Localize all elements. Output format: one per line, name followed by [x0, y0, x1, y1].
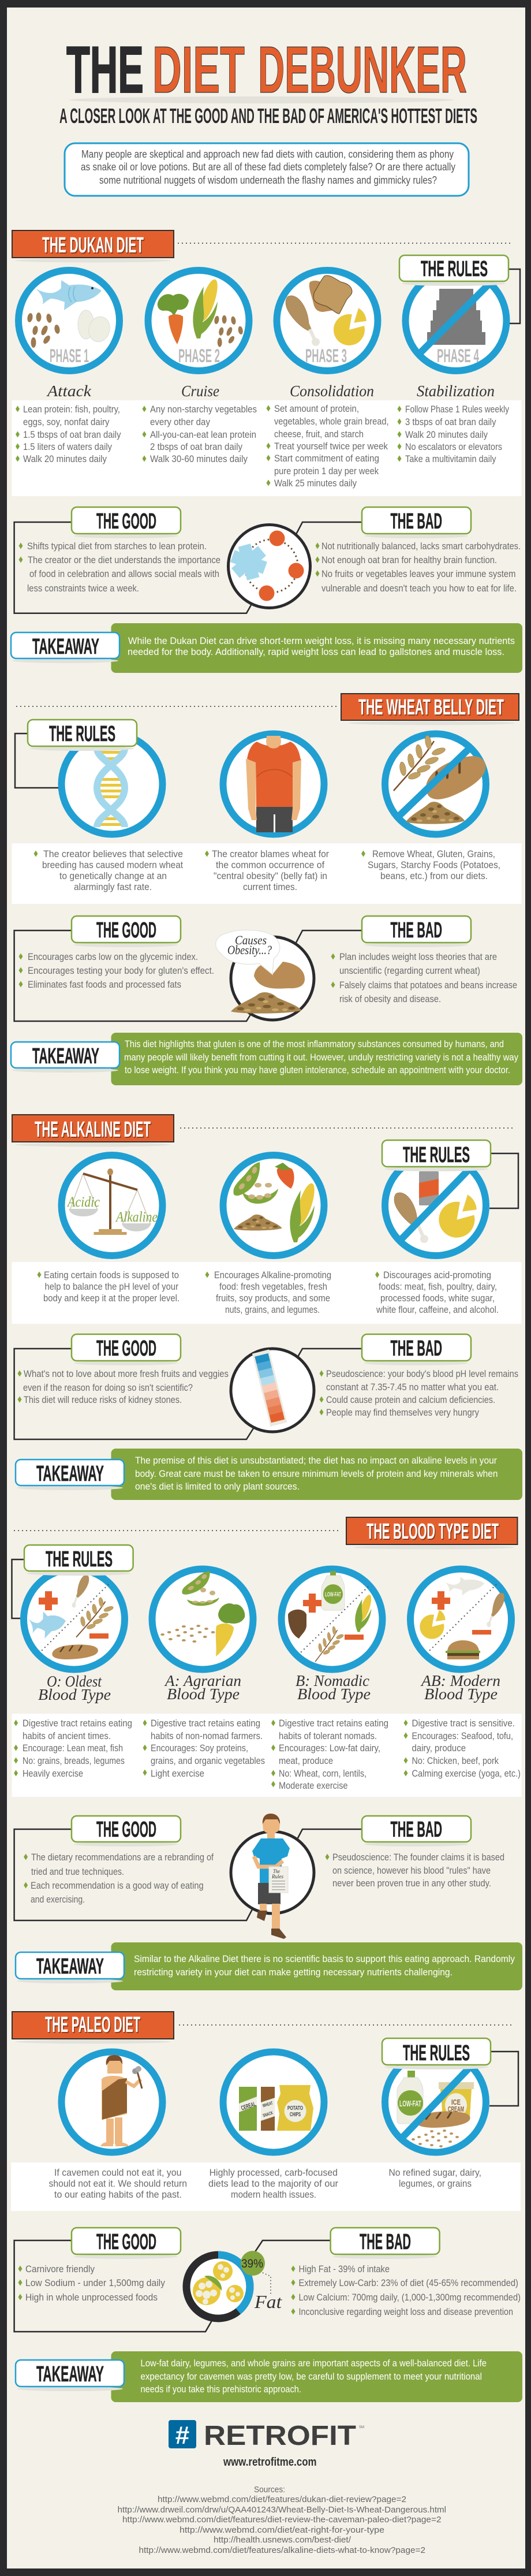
icon: ice cream tub: CREAM [448, 2105, 464, 2113]
list: consolidation: Set amount of protein, [274, 404, 359, 414]
panel: rules text: processed foods, white sugar, [380, 1293, 495, 1304]
panel: rules text: The creator blames wheat for [212, 849, 329, 859]
label: the bad: THE BAD [390, 918, 442, 943]
list: good: tried and true techniques. [31, 1867, 124, 1877]
list: type O: habits of ancient times. [23, 1731, 111, 1741]
sources: http://www.drweil.com/drw/u/QAA401243/Wheat-Belly-Diet-Is-Wheat-Dangerous.html [118, 2505, 446, 2515]
sources: http://www.webmd.com/diet/eat-right-for-your-type [180, 2525, 384, 2535]
icon: man with rules paper: The [273, 1868, 280, 1874]
label: the bad: THE BAD [390, 1818, 442, 1842]
icon: eggs [78, 310, 113, 344]
list: bad: Not enough oat bran for healthy brain function. [321, 555, 497, 565]
heading: The Dukan Diet: THE DUKAN DIET [43, 234, 144, 259]
list: attack [16, 404, 121, 464]
icon: carrot [158, 294, 189, 344]
panel: rules text: Remove Wheat, Gluten, Grains, [372, 849, 495, 859]
list: good: less constraints twice a week. [27, 583, 139, 594]
icon: obesity bubble with potato and grain: Causes [235, 933, 267, 947]
circle: belly [223, 734, 324, 834]
blood type names: Blood Type [38, 1686, 111, 1703]
section: Alkaline diet [12, 1115, 522, 1500]
list: type A: habits of non-nomad farmers. [151, 1731, 263, 1741]
phase names: Attack [46, 382, 92, 400]
rules label [12, 1545, 133, 1618]
panel: rules text: breeding has caused modern wheat [42, 860, 183, 870]
list: good: and exercising. [31, 1894, 85, 1905]
sources: Sources: [254, 2485, 285, 2495]
takeaway: Alkaline: TAKEAWAY [36, 1462, 104, 1486]
list: good: High in whole unprocessed foods [25, 2292, 158, 2303]
circle: balance scale: Alkaline [115, 1209, 158, 1225]
icon: potato chips: POTATO [287, 2105, 303, 2112]
panel: rules text: current times. [243, 882, 297, 892]
list: bad: unscientific (regarding current wheat) [339, 966, 480, 976]
list: cruise: Any non-starchy vegetables [150, 404, 257, 415]
icon: fat ring 39 percent: 39% [241, 2257, 263, 2270]
sources: http://www.webmd.com/diet/features/dukan-diet-review?page=2 [158, 2495, 406, 2504]
panel: rules text: white flour, caffeine, and alcohol. [376, 1305, 499, 1315]
list: cruise: 2 tbsps of oat bran daily [150, 442, 243, 452]
label: the good [72, 1816, 181, 1847]
label: the bad [362, 1816, 471, 1847]
icon: fat ring 39 percent [186, 2251, 282, 2318]
list: bad: People may find themselves very hungry [326, 1408, 480, 1418]
panel: rules text: body and keep it at the proper level. [43, 1293, 180, 1304]
intro box: as snake oil or love potions. But are all of these fad diets completely false? Or are there actually [81, 161, 455, 173]
heading: The Paleo Diet [12, 2012, 174, 2043]
circle: balance scale [61, 1155, 163, 1256]
panel: rules text [11, 2162, 521, 2211]
list: bad: on science, however his blood "rules" have [332, 1866, 491, 1876]
panel: rules text: Eating certain foods is supposed to [44, 1270, 179, 1280]
label: the bad [362, 1334, 471, 1365]
list: stabilization: Walk 20 minutes daily [405, 430, 488, 440]
list: bad [326, 1852, 504, 1889]
label: the bad: THE BAD [360, 2230, 411, 2254]
circle: DNA [61, 734, 163, 834]
circle: balance scale: Acidic [66, 1194, 100, 1210]
circle: type B [282, 1569, 382, 1669]
panel: blood type rules [12, 1714, 522, 1797]
takeaway: Paleo: expectancy for cavemen was pretty low, be careful to supplement to meet your nutritional [141, 2371, 482, 2382]
heading: The Paleo Diet: THE PALEO DIET [45, 2013, 140, 2037]
panel: rules text [12, 843, 522, 904]
list: good: Each recommendation is a good way of eating [31, 1881, 204, 1891]
list: type A: Light exercise [151, 1769, 204, 1779]
list: type A: Digestive tract retains eating [151, 1718, 260, 1729]
list: type AB [404, 1718, 521, 1779]
panel: rules text: If cavemen could not eat it, you [54, 2168, 181, 2178]
panel: rules text: Encourages Alkaline-promoting [214, 1270, 331, 1280]
label: the bad: THE BAD [390, 509, 442, 534]
blood type names: O: Oldest [47, 1673, 102, 1690]
panel: rules text: beans, etc.) from our diets. [380, 871, 488, 881]
list: type O: Heavily exercise [23, 1769, 83, 1779]
panel: rules text: Discourages acid-promoting [383, 1270, 491, 1280]
logo: Retrofit: RETROFIT [204, 2421, 356, 2451]
list: good [17, 1369, 229, 1405]
label: the good: THE GOOD [96, 918, 156, 943]
list: good [18, 952, 214, 990]
blood type names: A: Agrarian [164, 1672, 241, 1689]
label: the good [72, 1334, 181, 1365]
rules label [399, 255, 520, 323]
blood type names: Blood Type [297, 1685, 371, 1703]
heading: The Alkaline Diet: THE ALKALINE DIET [36, 1119, 151, 1143]
good and bad: Paleo [14, 2228, 521, 2332]
heading: The Alkaline Diet [12, 1115, 174, 1147]
icon: pH strip [231, 1349, 314, 1432]
takeaway: Paleo: Low-fat dairy, legumes, and whole grains are important aspects of a well-balanced diet. Life [141, 2358, 487, 2369]
icon: snack box: SNACK [262, 2110, 274, 2119]
list: good: Low Sodium - under 1,500mg daily [25, 2278, 166, 2288]
panel: rules text: modern health issues. [231, 2190, 316, 2200]
takeaway: Dukan: needed for the body. Additionally, rapid weight loss can lead to gallstones and muscle loss. [128, 646, 504, 657]
phase 2 circle: PHASE 2 [178, 345, 220, 366]
label: the good: THE GOOD [96, 1337, 156, 1361]
list: stabilization [397, 404, 510, 464]
panel: rules text: The creator believes that selective [43, 849, 183, 859]
good and bad: Wheat Belly [14, 916, 517, 1021]
takeaway: Wheat Belly: TAKEAWAY [32, 1044, 99, 1069]
title shadow [69, 96, 454, 103]
list: cruise: every other day [150, 417, 211, 427]
panel: rules text: food: fresh vegetables, fresh [219, 1282, 327, 1292]
circle: no acid foods [385, 1155, 486, 1256]
section: Wheat Belly diet [11, 694, 522, 1085]
phase names: Cruise [181, 382, 219, 400]
list: good: This diet will reduce risks of kidney stones. [24, 1395, 182, 1405]
panel: rules text: foods: meat, fish, poultry, dairy, [379, 1282, 497, 1292]
list: good: Shifts typical diet from starches to lean protein. [27, 541, 207, 552]
icon: low-fat jug [321, 1571, 345, 1610]
panel: phase rules [12, 400, 522, 496]
list: bad: Pseudoscience: The founder claims it is based [332, 1852, 504, 1863]
list: bad [315, 541, 521, 594]
list: good [18, 541, 220, 594]
panel: rules text: fruits, soy products, and some [216, 1293, 330, 1304]
title [66, 33, 467, 107]
phase 2 circle [148, 270, 249, 371]
list: stabilization: Take a multivitamin daily [405, 454, 496, 464]
icon: burger [446, 1640, 480, 1659]
phase names: Stabilization [417, 382, 495, 400]
panel: rules text: Sugars, Starchy Foods (Potatoes, [368, 860, 500, 870]
sources: http://www.webmd.com/diet/features/diet-review-the-caveman-paleo-diet?page=2 [122, 2515, 441, 2525]
takeaway: Alkaline [16, 1449, 522, 1500]
website: www.retrofitme.com [223, 2456, 316, 2469]
icon: snack box: WHEAT [262, 2100, 274, 2109]
list: stabilization: No escalators or elevators [405, 442, 502, 452]
label: the bad [362, 916, 471, 947]
list: bad: risk of obesity and disease. [339, 994, 441, 1004]
list: consolidation: vegetables, whole grain bread, [274, 416, 389, 427]
list: bad [291, 2264, 521, 2317]
intro box [65, 143, 469, 196]
circle: no refined food [385, 2052, 486, 2152]
list: type O [14, 1718, 132, 1779]
blood type names: B: Nomadic [296, 1672, 369, 1689]
phase 1 circle: PHASE 1 [50, 345, 89, 366]
circle: type A [152, 1569, 253, 1669]
takeaway: Alkaline: one's diet is limited to only plant sources. [135, 1481, 300, 1492]
blood type names: Blood Type [167, 1685, 240, 1703]
intro box: Many people are skeptical and approach new fad diets with caution, considering them as phony [81, 148, 454, 160]
list: attack: 1.5 liters of waters daily [23, 442, 113, 452]
section: Dukan diet [11, 230, 522, 673]
icon: low-fat jug: LOW-FAT [399, 2099, 421, 2109]
panel: rules text: alarmingly fast rate. [74, 882, 152, 892]
list: type AB: Encourages: Seafood, tofu, [412, 1731, 513, 1741]
panel: rules text: should not eat it. We should return [48, 2179, 187, 2189]
circle: no wheat [385, 734, 492, 834]
heading: The Alkaline Diet: THE ALKALINE DIET [35, 1118, 151, 1142]
rules label [382, 1140, 518, 1208]
list: bad: High Fat - 39% of intake [299, 2264, 390, 2275]
phase names [46, 382, 495, 400]
icon: snack box [261, 2087, 275, 2131]
rules label: THE RULES [46, 1547, 113, 1572]
takeaway: Dukan: While the Dukan Diet can drive short-term weight loss, it is missing many necessary nutrients [128, 635, 515, 646]
title word: THE: THE [66, 33, 144, 107]
list: attack: Lean protein: fish, poultry, [23, 404, 120, 415]
takeaway: Blood Type: restricting variety in your diet can make getting necessary nutrients challenging. [134, 1967, 453, 1978]
good and bad: Blood Type [14, 1814, 504, 1939]
rules label: THE RULES [403, 1143, 470, 1167]
list: good: Encourages carbs low on the glycemic index. [28, 952, 198, 962]
list: bad: constant at 7.35-7.45 no matter what you eat. [326, 1382, 499, 1393]
label: the good: THE GOOD [96, 2230, 156, 2254]
list: cruise [142, 404, 257, 464]
label: the bad [331, 2228, 440, 2259]
logo: Retrofit: SM [359, 2426, 364, 2429]
takeaway: Paleo [16, 2351, 522, 2402]
label: the good: THE GOOD [96, 1818, 156, 1842]
panel: rules text: help to balance the pH level of your [45, 1282, 178, 1292]
list: stabilization: Follow Phase 1 Rules weekly [405, 404, 510, 415]
panel: rules text: "central obesity" (belly fat) in [214, 871, 327, 881]
list: type A [143, 1718, 265, 1779]
phase 4 circle: PHASE 4 [437, 345, 479, 366]
icon: ice cream tub: ICE [451, 2098, 461, 2106]
blood type names: AB: Modern [420, 1672, 500, 1689]
good and bad: Alkaline [14, 1334, 518, 1439]
section: Paleo diet [11, 2012, 522, 2402]
list: good: The dietary recommendations are a rebranding of [31, 1852, 214, 1863]
section: Blood Type diet [12, 1517, 522, 1990]
list: good: of food in celebration and allows social meals with [29, 569, 219, 579]
panel: rules text: to our eating habits of the past. [54, 2190, 182, 2200]
icon: cereal box [239, 2087, 257, 2131]
icon: obesity bubble with potato and grain: Obesity...? [227, 943, 272, 957]
list: consolidation: Treat yourself twice per week [274, 441, 388, 452]
icon: man with rules paper: Rules [271, 1874, 283, 1879]
takeaway: Dukan: TAKEAWAY [32, 635, 99, 659]
phase 4 circle [405, 270, 507, 371]
icon: cereal box: CEREAL [240, 2101, 257, 2112]
list: type B: habits of tolerant nomads. [279, 1731, 377, 1741]
list: cruise: All-you-can-eat lean protein [150, 430, 256, 440]
panel: rules text: nuts, grains, and legumes. [225, 1305, 320, 1315]
circle: caveman [61, 2052, 163, 2152]
logo: Retrofit [169, 2420, 364, 2451]
list: type B: Encourages: Low-fat dairy, [279, 1743, 380, 1754]
icon: fish [36, 280, 102, 310]
list: type A: Encourages: Soy proteins, [151, 1743, 248, 1754]
list: type B: Digestive tract retains eating [279, 1718, 388, 1729]
takeaway: Alkaline: The premise of this diet is unsubstantiated; the diet has no impact on alkaline levels in your [135, 1455, 497, 1466]
icon: potato chips: CHIPS [290, 2112, 301, 2118]
label: the good: THE GOOD [96, 509, 156, 534]
icon: stairs [427, 289, 485, 345]
list: bad: No fruits or vegetables leaves your immune system [321, 569, 516, 579]
heading: The Dukan Diet: THE DUKAN DIET [42, 233, 144, 258]
list: consolidation: Start commitment of eating [274, 453, 379, 464]
list: good: Eliminates fast foods and processed fats [28, 980, 181, 990]
list: attack: eggs, soy, nonfat dairy [23, 417, 110, 427]
panel: rules text: diets lead to the majority of our [208, 2179, 338, 2189]
list: type B: Moderate exercise [279, 1781, 347, 1791]
list: bad [320, 1369, 518, 1418]
icon: low-fat jug: LOW-FAT [325, 1591, 341, 1598]
rules label [382, 2038, 518, 2106]
rules label: THE RULES [49, 722, 115, 746]
icon: dotted ring with patches [229, 524, 311, 608]
list: consolidation: pure protein 1 day per week [274, 466, 379, 477]
intro box: some nutritional nuggets of wisdom underneath the flashy names and gimmicky rules? [99, 174, 437, 186]
list: attack: 1.5 tbsps of oat bran daily [23, 430, 121, 440]
list: type O: No: grains, breads, legumes [23, 1756, 125, 1766]
panel: rules text: the common occurrence of [216, 860, 324, 870]
takeaway: Blood Type: TAKEAWAY [36, 1955, 104, 1979]
takeaway: Dukan [11, 623, 522, 673]
list: consolidation: cheese, fruit, and starch [274, 429, 364, 440]
takeaway: Paleo: TAKEAWAY [36, 2362, 104, 2387]
list: good: even if the reason for doing so isn't scientific? [23, 1383, 193, 1393]
list: bad: Plan includes weight loss theories that are [339, 952, 497, 962]
icon: potato chips [277, 2085, 313, 2131]
label: the good [72, 2228, 181, 2259]
blood type names: Blood Type [424, 1685, 498, 1703]
list: type AB: Digestive tract is sensitive. [412, 1718, 515, 1729]
phase 3 circle [277, 270, 377, 371]
icon: fat ring 39 percent: Fat [254, 2291, 282, 2312]
icon: low-fat jug [397, 2071, 423, 2124]
phase 3 circle: PHASE 3 [305, 345, 347, 366]
label: the bad: THE BAD [390, 1337, 442, 1361]
list: type B [271, 1718, 388, 1791]
list: type B: No: Wheat, corn, lentils, [279, 1769, 367, 1779]
sources [118, 2485, 446, 2555]
circle: type AB [410, 1569, 511, 1669]
phase 1 circle [18, 270, 119, 371]
list: type O: Encourage: Lean meat, fish [23, 1743, 123, 1754]
icon: obesity bubble with potato and grain [216, 930, 314, 1020]
circle: type O [24, 1569, 125, 1669]
takeaway: Alkaline: body. Great care must be taken to ensure minimum levels of protein and key minerals when [135, 1468, 498, 1479]
list: good: The creator or the diet understands the importance [28, 555, 220, 565]
icon: ice cream tub [439, 2082, 474, 2117]
phase names: Consolidation [290, 382, 374, 400]
label: the bad [362, 507, 471, 538]
icon: toast [309, 276, 352, 314]
list: type A: grains, and organic vegetables [151, 1756, 265, 1766]
list: consolidation [267, 404, 389, 489]
sources: http://health.usnews.com/best-diet/ [214, 2535, 351, 2545]
rules label [15, 720, 137, 788]
heading: The Blood Type Diet [346, 1517, 517, 1549]
list: type AB: No: Chicken, beef, pork [412, 1756, 499, 1766]
label: the good [72, 916, 181, 947]
panel: rules text: No refined sugar, dairy, [389, 2168, 481, 2178]
heading: The Wheat Belly Diet [341, 694, 519, 725]
good and bad: Dukan [14, 507, 521, 613]
list: stabilization: 3 tbsps of oat bran daily [405, 417, 496, 427]
heading: The Paleo Diet: THE PALEO DIET [46, 2014, 141, 2038]
list: good: Carnivore friendly [25, 2264, 95, 2275]
list: bad: never been proven true in any other study. [332, 1878, 491, 1889]
blood type names [38, 1672, 500, 1703]
list: type AB: dairy, produce [412, 1743, 466, 1754]
list: good [24, 1852, 214, 1905]
list: type O: Digestive tract retains eating [23, 1718, 132, 1729]
list: cruise: Walk 30-60 minutes daily [150, 454, 248, 464]
sources: http://www.webmd.com/diet/features/alkaline-diets-what-to-know?page=2 [139, 2545, 425, 2555]
circle: alkaline foods [223, 1155, 324, 1256]
list: bad: Could cause protein and calcium deficiencies. [326, 1395, 495, 1405]
panel: rules text: to genetically change at an [59, 871, 167, 881]
panel: rules text: Highly processed, carb-focused [210, 2168, 338, 2178]
label: the good [72, 507, 181, 538]
list: type B: meat, produce [279, 1756, 333, 1766]
panel: rules text: legumes, or grains [399, 2179, 472, 2189]
heading: The Dukan Diet [12, 230, 174, 262]
list: attack: Walk 20 minutes daily [23, 454, 107, 464]
takeaway: Paleo: needs if you take this prehistoric approach. [141, 2384, 301, 2395]
circle: processed food [223, 2052, 324, 2152]
list: good: What's not to love about more fresh fruits and veggies [24, 1369, 229, 1379]
list: bad [331, 952, 517, 1004]
list: consolidation: Walk 25 minutes daily [274, 478, 357, 489]
icon: man with rules paper [231, 1814, 314, 1939]
panel: rules text [12, 1262, 522, 1324]
takeaway: Blood Type [16, 1942, 522, 1990]
list: good: Encourages testing your body for gluten's effect. [28, 966, 214, 976]
rules label: THE RULES [403, 2041, 470, 2065]
title word: DIET: DIET [152, 33, 245, 107]
takeaway: Wheat Belly [11, 1033, 522, 1085]
list: good [18, 2264, 166, 2303]
logo: Retrofit: # [175, 2421, 189, 2450]
